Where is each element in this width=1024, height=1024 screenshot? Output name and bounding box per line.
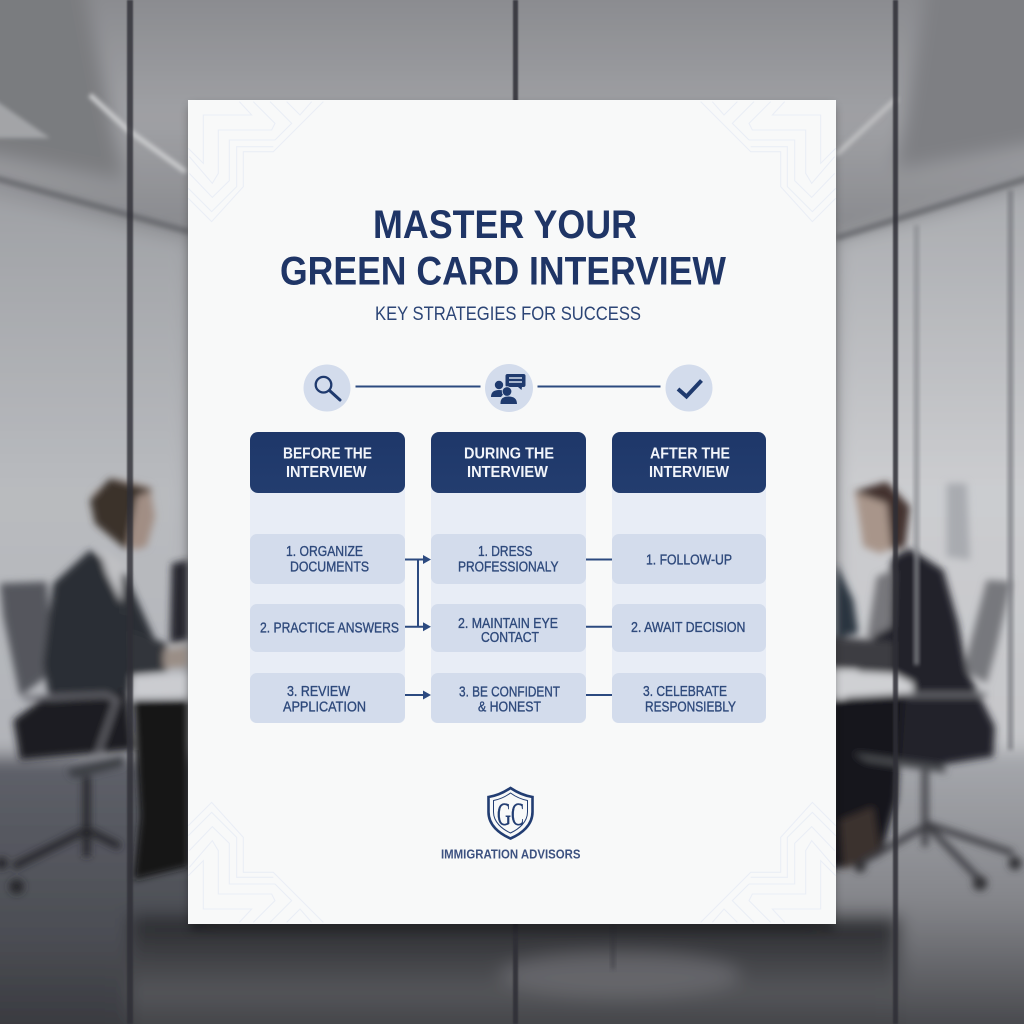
title bbox=[280, 203, 726, 294]
step 2: 2. MAINTAIN EYE bbox=[458, 616, 558, 632]
wall and ceiling frame lines bbox=[0, 178, 1024, 238]
ceiling lights bbox=[0, 95, 897, 172]
step 3: & HONEST bbox=[478, 700, 541, 716]
header: AFTER THE bbox=[650, 446, 730, 462]
header: INTERVIEW bbox=[286, 464, 367, 481]
column: during the interview bbox=[431, 432, 586, 723]
icon: people with speech bubble bbox=[485, 364, 533, 412]
step 1: 1. DRESS bbox=[478, 544, 532, 560]
title: MASTER YOUR bbox=[373, 203, 637, 247]
logo: shield with monogram bbox=[488, 788, 532, 838]
right seated man bbox=[830, 482, 1022, 891]
step 1: 1. FOLLOW-UP bbox=[646, 552, 732, 568]
step 1: DOCUMENTS bbox=[290, 560, 369, 576]
step 1 bbox=[431, 534, 586, 584]
column: after the interview bbox=[612, 432, 766, 723]
left seated man bbox=[0, 478, 188, 894]
logo label: IMMIGRATION ADVISORS bbox=[441, 848, 580, 862]
header: INTERVIEW bbox=[649, 464, 729, 481]
header bbox=[250, 432, 405, 493]
connector arrows between columns bbox=[405, 555, 612, 700]
step 3 bbox=[250, 673, 405, 723]
step 2: 2. AWAIT DECISION bbox=[631, 620, 746, 636]
header: DURING THE bbox=[464, 446, 554, 462]
icon: magnifying glass bbox=[304, 364, 350, 412]
header: INTERVIEW bbox=[467, 464, 548, 481]
step 3: 3. REVIEW bbox=[287, 684, 350, 700]
decorative corner patterns bbox=[188, 102, 836, 922]
step 1: PROFESSIONALY bbox=[458, 560, 559, 576]
step 3 bbox=[612, 673, 766, 723]
timeline with phase icons bbox=[304, 364, 712, 412]
step 2 bbox=[250, 604, 405, 652]
step 3: 3. CELEBRATE bbox=[643, 684, 727, 700]
step 1 bbox=[250, 534, 405, 584]
step 3 bbox=[431, 673, 586, 723]
subtitle: KEY STRATEGIES FOR SUCCESS bbox=[375, 303, 641, 325]
step 1: 1. ORGANIZE bbox=[286, 544, 363, 560]
step 2: 2. PRACTICE ANSWERS bbox=[260, 620, 399, 636]
title: GREEN CARD INTERVIEW bbox=[280, 250, 726, 294]
icon: check mark bbox=[666, 364, 712, 412]
header: BEFORE THE bbox=[283, 446, 372, 462]
header bbox=[431, 432, 586, 493]
step 3: APPLICATION bbox=[283, 700, 366, 716]
poster card bbox=[188, 100, 836, 924]
column: before the interview bbox=[250, 432, 405, 723]
poster shadow bbox=[190, 106, 834, 930]
step 1 bbox=[612, 534, 766, 584]
step 2 bbox=[612, 604, 766, 652]
step 2 bbox=[431, 604, 586, 652]
logo: shield with monogram: GC bbox=[497, 797, 524, 833]
header bbox=[612, 432, 766, 493]
step 3: RESPONSIEBLY bbox=[645, 700, 736, 716]
step 3: 3. BE CONFIDENT bbox=[459, 684, 560, 700]
step 2: CONTACT bbox=[481, 630, 539, 646]
